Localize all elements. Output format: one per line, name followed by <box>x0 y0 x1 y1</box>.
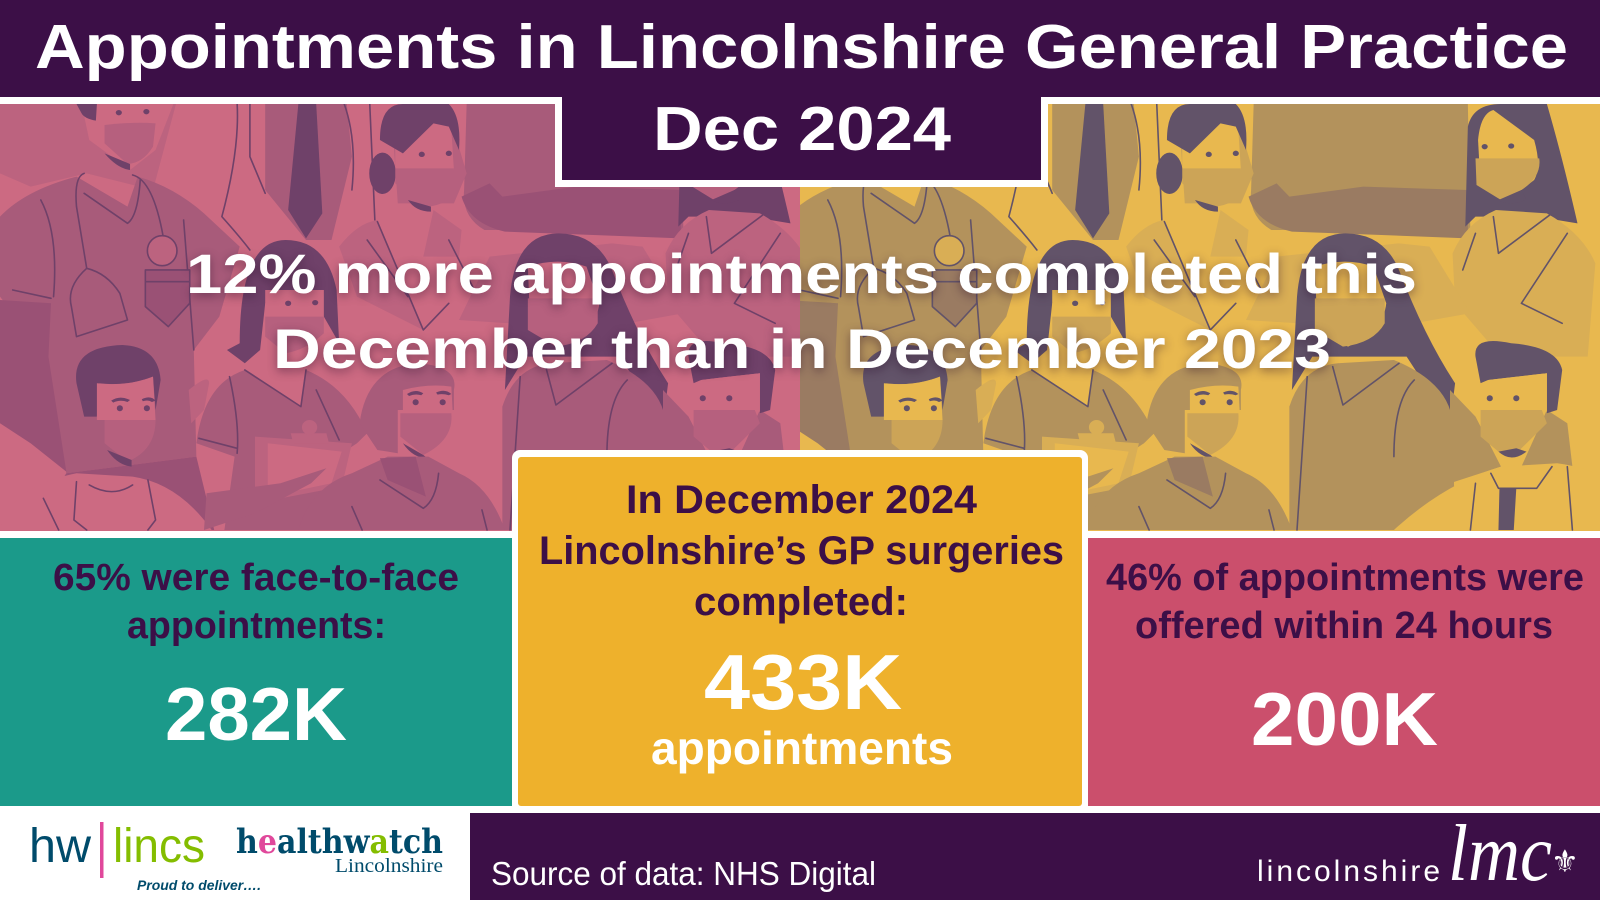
logo: lincolnshire lmc: lincolnshire <box>1257 855 1440 888</box>
panel: total appointments: appointments <box>651 722 953 774</box>
logo: lincolnshire lmc: ⚜ <box>1551 844 1579 880</box>
footer bar: source <box>470 813 1600 900</box>
panel: total appointments: completed: <box>694 580 908 624</box>
title text: Appointments in Lincolnshire General Practice <box>35 13 1568 82</box>
illustration: healthcare workers, yellow tint <box>800 104 1600 531</box>
logo: lincolnshire lmc <box>1257 810 1579 898</box>
date subtitle: Dec 2024 <box>653 95 952 164</box>
panel: total appointments: In December 2024 <box>626 478 978 522</box>
illustration: healthcare workers, pink tint <box>0 104 800 531</box>
headline statement: December than in December 2023 <box>273 317 1331 380</box>
panel: offered within 24 hours <box>1088 538 1600 806</box>
stat: 200K: 200K <box>1251 677 1438 761</box>
panel: total appointments: Lincolnshire’s GP surgeries <box>539 529 1064 573</box>
stat: 433K: 433K <box>704 638 902 726</box>
panel: face-to-face: 65% were face-to-face <box>53 557 459 599</box>
logo: hw lincs: Proud to deliver…. <box>137 877 261 893</box>
stat: 282K: 282K <box>165 672 347 756</box>
panel: offered within 24 hours: offered within 24 hours <box>1135 605 1553 647</box>
logo: hw lincs <box>29 820 261 893</box>
panel: face-to-face <box>0 538 512 806</box>
footer bar: source: Source of data: NHS Digital <box>491 855 876 892</box>
panel: face-to-face: appointments: <box>127 605 386 647</box>
headline statement <box>186 242 1417 380</box>
logo: healthwatch Lincolnshire: Lincolnshire <box>335 855 443 877</box>
logo: hw lincs: lincs <box>113 820 205 873</box>
panel: total appointments <box>512 450 1088 813</box>
logo: hw lincs: hw <box>29 820 91 873</box>
title banner <box>0 0 1600 187</box>
logo: lincolnshire lmc: lmc <box>1448 810 1552 898</box>
panel: offered within 24 hours: 46% of appointments were <box>1106 557 1584 599</box>
headline statement: 12% more appointments completed this <box>186 242 1417 305</box>
logo: healthwatch Lincolnshire: healthwatch <box>236 822 443 862</box>
